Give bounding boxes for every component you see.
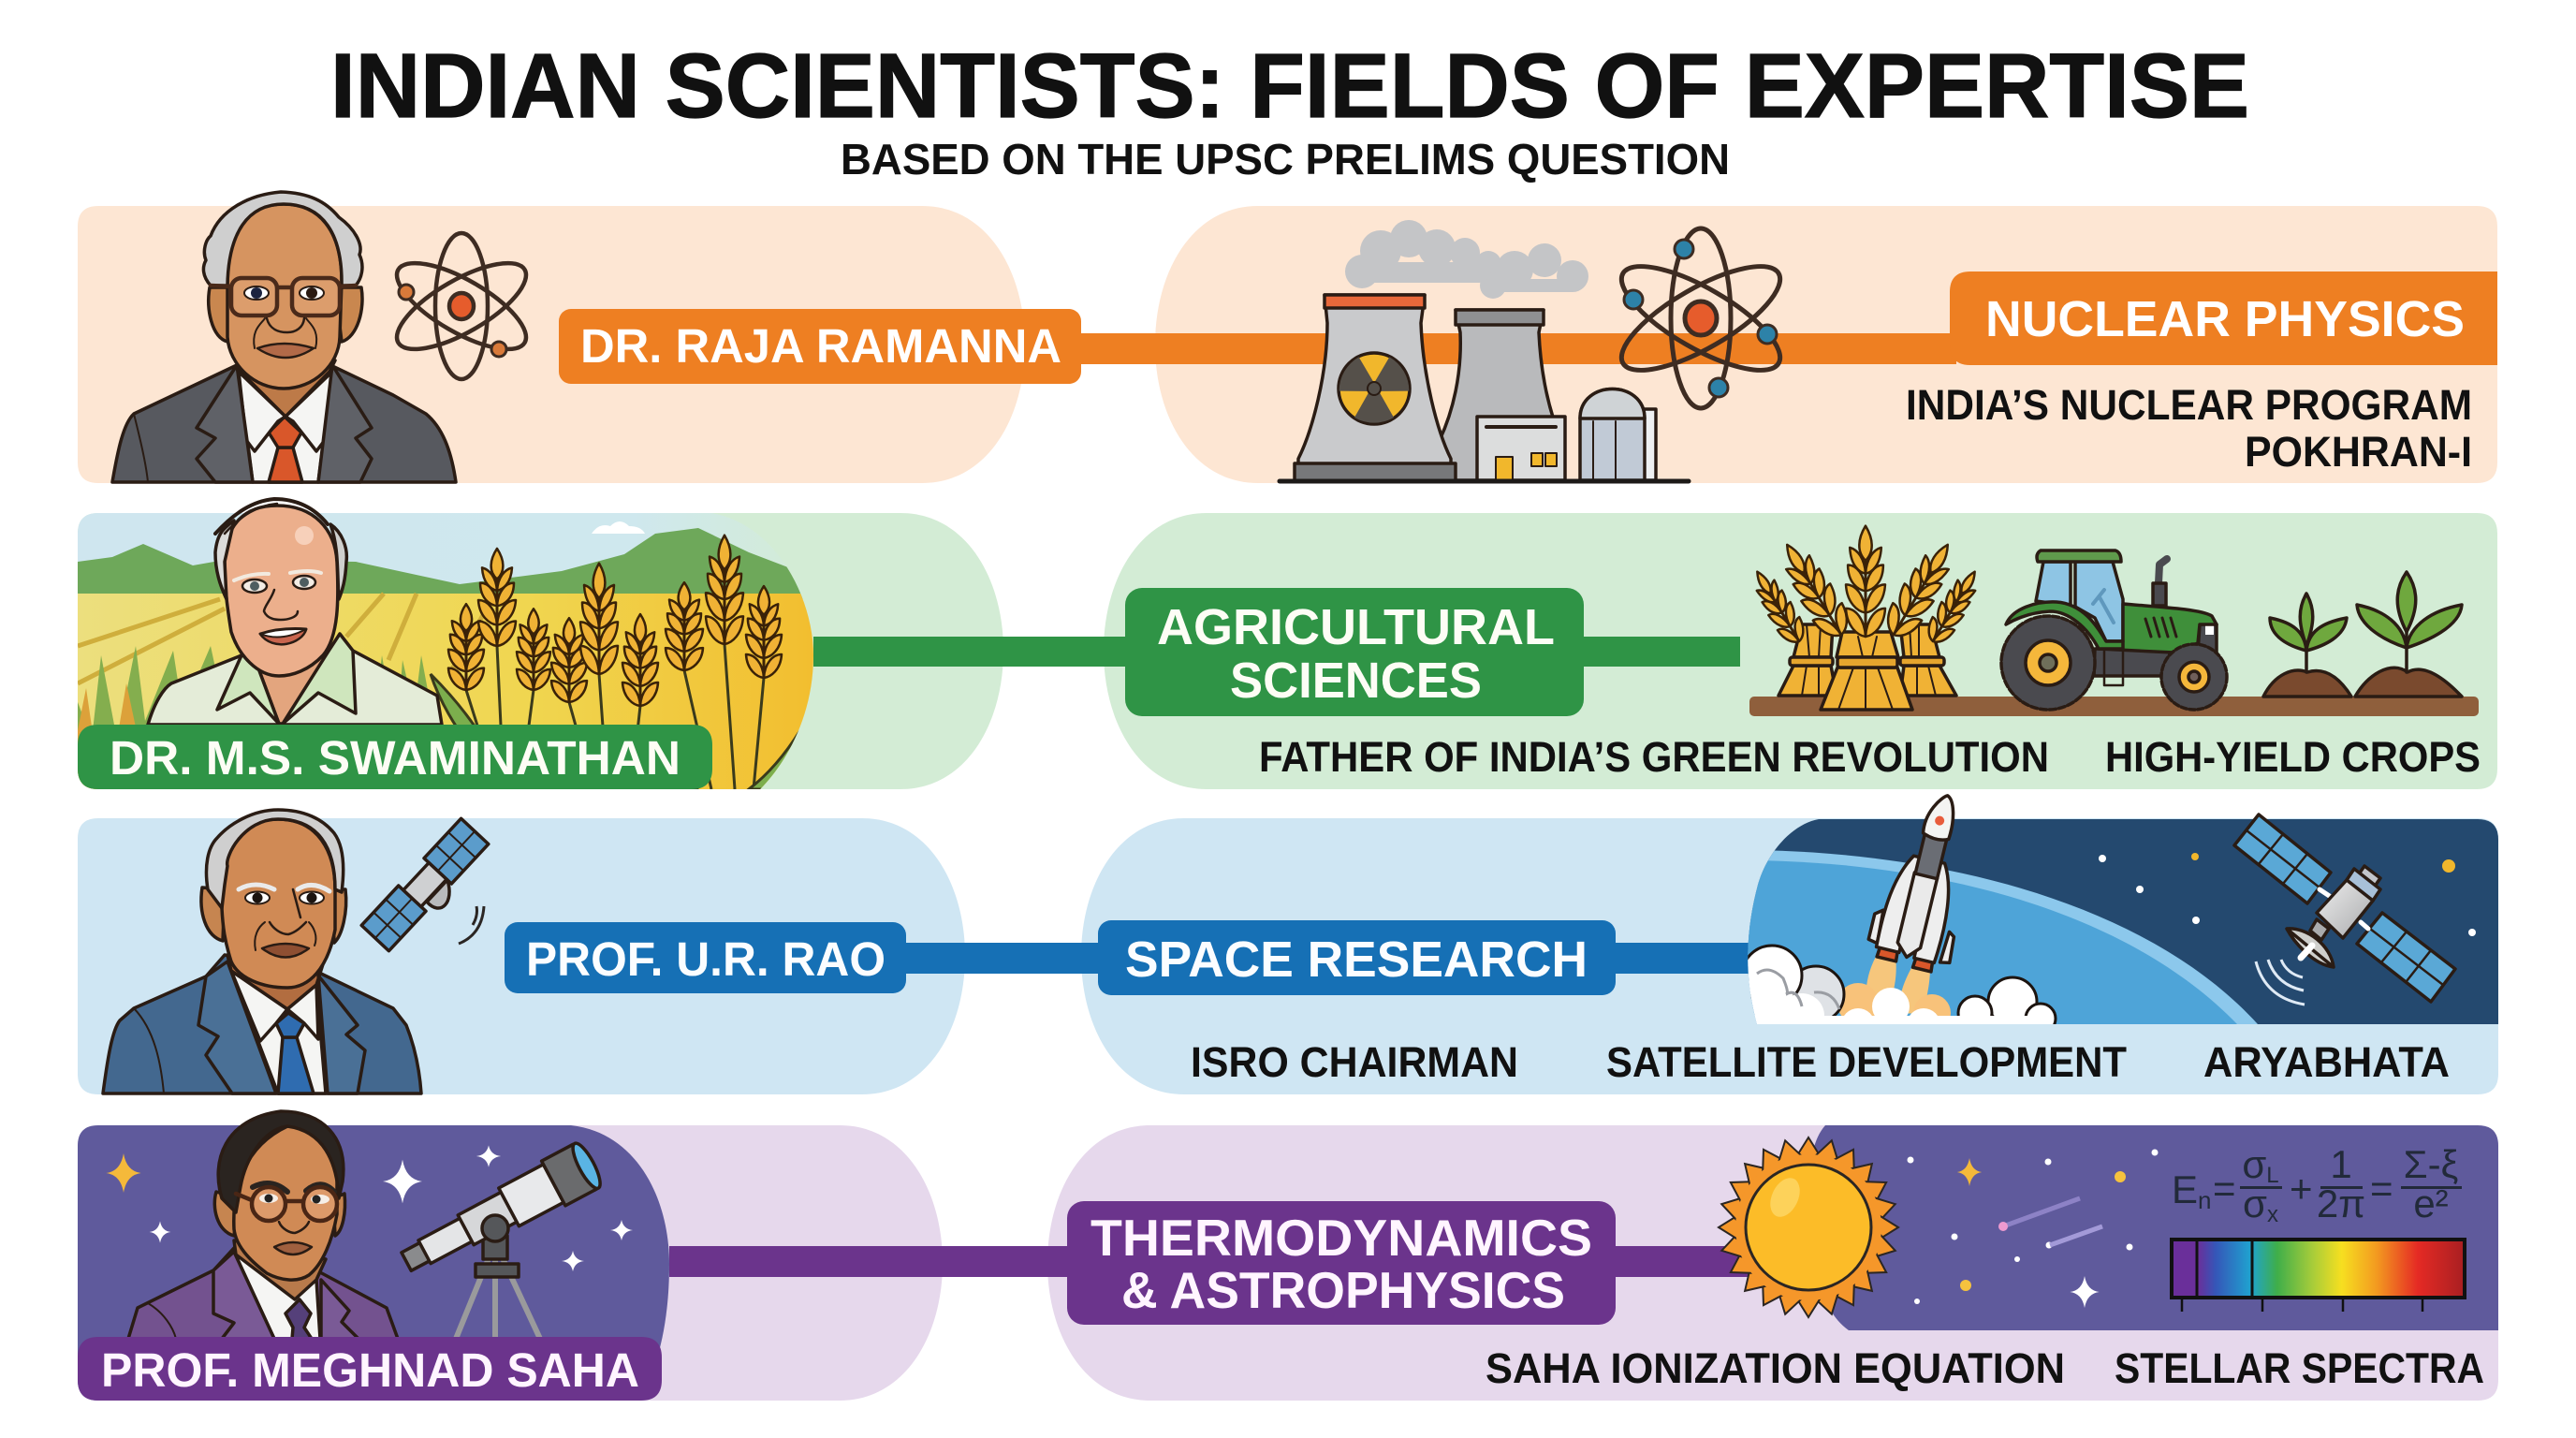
icon: wheat sheaves: [1747, 526, 1985, 710]
name label: Dr. Raja Ramanna: [559, 309, 1081, 384]
title: INDIAN SCIENTISTS: FIELDS OF EXPERTISE: [330, 35, 2249, 137]
equation: +: [2290, 1167, 2313, 1211]
equation: x: [2267, 1202, 2278, 1227]
wheat stalks and leaves: [431, 644, 800, 789]
text: high-yield crops: HIGH-YIELD CROPS: [2105, 733, 2481, 781]
equation: E: [2172, 1167, 2198, 1211]
icon: signal waves: [2256, 960, 2305, 1005]
equation: [2172, 1142, 2462, 1227]
row: Prof. U.R. Rao, space research: [78, 785, 2499, 1094]
connector: green: [813, 637, 1740, 667]
equation: n: [2198, 1186, 2211, 1214]
panel: astrophysics right background: [1047, 1125, 2498, 1401]
text: India's nuclear program: INDIA’S NUCLEAR PROGRAM: [1906, 381, 2472, 429]
text: stellar spectra: STELLAR SPECTRA: [2115, 1344, 2484, 1392]
panel: agriculture right background: [1104, 513, 2497, 789]
shooting stars: [2003, 1198, 2080, 1226]
portrait: Prof. U.R. Rao: [103, 810, 421, 1093]
scene: space launch: [1741, 819, 2499, 1025]
text: Pokhran-I: POKHRAN-I: [2245, 428, 2472, 476]
portrait: Dr. M.S. Swaminathan: [148, 499, 442, 725]
panel: space right background: [1081, 818, 2498, 1094]
icon: telescope: [394, 1140, 605, 1339]
field label: agricultural sciences: [1125, 588, 1584, 716]
name label: Dr. Raja Ramanna: DR. RAJA RAMANNA: [580, 319, 1061, 373]
icon: small satellite: [361, 818, 496, 958]
field label: nuclear physics: NUCLEAR PHYSICS: [1985, 291, 2465, 347]
ground strip: [1749, 697, 2479, 716]
equation: L: [2266, 1163, 2279, 1188]
subtitle: BASED ON THE UPSC PRELIMS QUESTION: [841, 135, 1730, 183]
panel: Saha left background: [78, 1125, 943, 1401]
row: Prof. Meghnad Saha, thermodynamics and astrophysics: [78, 1111, 2499, 1401]
icon: small atom: [385, 233, 538, 379]
field label: agricultural sciences: AGRICULTURAL: [1157, 599, 1555, 655]
equation: Σ-ξ: [2404, 1142, 2458, 1186]
name label: Prof. U.R. Rao: PROF. U.R. RAO: [526, 932, 886, 986]
icon: signal arcs: [459, 906, 484, 944]
scene: stellar background: [1797, 1125, 2499, 1331]
stars: [2099, 855, 2476, 936]
icon: large satellite: [2234, 814, 2455, 1002]
connector: purple: [669, 1246, 1821, 1277]
text: father of India's green revolution: FATHER OF INDIA’S GREEN REVOLUTION: [1259, 733, 2049, 781]
field label: space research: [1098, 920, 1616, 995]
text: Aryabhata: ARYABHATA: [2203, 1038, 2450, 1086]
chart: spectrum bar: [2172, 1240, 2465, 1312]
field label: thermodynamics and astrophysics: THERMODYNAMICS: [1090, 1209, 1592, 1267]
portrait: Dr. Raja Ramanna: [112, 192, 456, 482]
icon: seedlings: [2263, 572, 2462, 697]
equation: =: [2213, 1167, 2236, 1211]
text: Saha ionization equation: SAHA IONIZATION EQUATION: [1486, 1344, 2065, 1392]
panel: nuclear physics right background: [1155, 206, 2497, 483]
text: ISRO chairman: ISRO CHAIRMAN: [1191, 1038, 1518, 1086]
field label: thermodynamics and astrophysics: & ASTROPHYSICS: [1121, 1261, 1565, 1319]
illustration: nuclear plant: [1280, 220, 1689, 481]
connector: blue: [906, 943, 1753, 974]
panel: Rao left background: [78, 818, 965, 1094]
panel: Swaminathan left background: [78, 513, 1003, 789]
equation: 1: [2330, 1142, 2352, 1186]
icon: tractor: [2001, 550, 2227, 710]
equation: σ: [2242, 1142, 2266, 1186]
scene: night sky: [78, 1125, 677, 1401]
field label: space research: SPACE RESEARCH: [1125, 932, 1588, 988]
field label: nuclear physics: [1950, 271, 2497, 365]
row: Dr. M.S. Swaminathan, agricultural sciences: [78, 499, 2497, 790]
field label: agricultural sciences: SCIENCES: [1230, 653, 1482, 709]
equation: σ: [2243, 1181, 2267, 1225]
icon: sun: [1718, 1137, 1899, 1318]
scene: wheat field: [78, 513, 827, 790]
row: Dr. Raja Ramanna, nuclear physics: [78, 192, 2497, 483]
equation: e²: [2413, 1181, 2449, 1225]
name label: Prof. U.R. Rao: [505, 922, 906, 993]
icon: rocket: [1853, 785, 1987, 1022]
equation: =: [2370, 1167, 2393, 1211]
equation: 2π: [2317, 1181, 2365, 1225]
portrait: Prof. Meghnad Saha: [128, 1111, 398, 1339]
panel: Ramanna left background: [78, 206, 1025, 483]
icon: large atom: [1608, 228, 1793, 408]
clouds: [1748, 944, 2057, 1024]
text: satellite development: SATELLITE DEVELOPMENT: [1606, 1038, 2127, 1086]
name label: Dr. M.S. Swaminathan: DR. M.S. SWAMINATHAN: [110, 731, 681, 785]
connector: orange: [1076, 333, 1956, 364]
name label: Prof. Meghnad Saha: PROF. MEGHNAD SAHA: [101, 1343, 639, 1397]
field label: thermodynamics and astrophysics: [1067, 1201, 1616, 1325]
